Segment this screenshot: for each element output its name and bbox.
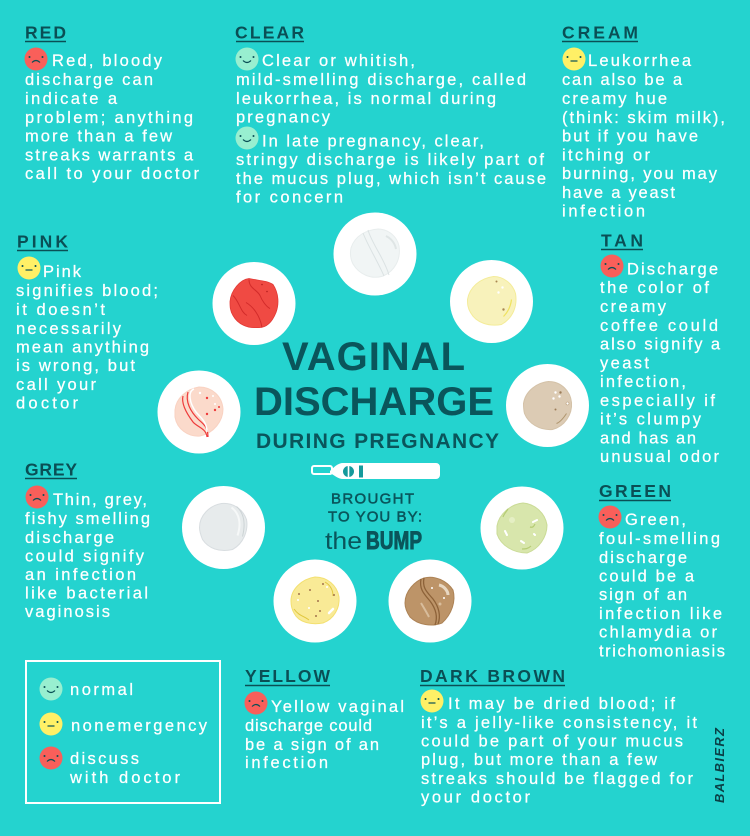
text: cream description: creamy hue: [562, 90, 667, 108]
text: dark brown description: plug, but more than a few: [421, 751, 657, 769]
icon: pregnancy test: [312, 463, 440, 479]
heading: grey: GREY: [25, 460, 77, 480]
text: yellow description: Yellow vaginal: [271, 698, 404, 716]
heading: yellow: YELLOW: [245, 666, 330, 686]
text: green description: [599, 511, 725, 660]
sample: tan: [506, 364, 589, 447]
text: tan description: Discharge: [627, 260, 718, 278]
legend icon: normal: [40, 678, 62, 700]
text: cream description: burning, you may: [562, 165, 718, 183]
icon: happy face: [236, 48, 258, 70]
title: [254, 335, 499, 453]
legend labels: nonemergency: [71, 717, 208, 735]
text: green description: infection like: [599, 605, 722, 623]
sample: red: [212, 262, 296, 345]
text: grey description: Thin, grey,: [53, 491, 147, 509]
heading: green: GREEN: [599, 481, 671, 501]
text: cream description: have a yeast: [562, 184, 675, 202]
sample: dark brown: [388, 560, 472, 642]
text: tan description: yeast: [600, 354, 649, 372]
text: dark brown description: your doctor: [421, 788, 530, 806]
text: pink description: Pink: [43, 263, 82, 281]
icon: happy face: [236, 126, 258, 150]
text: pink description: call your: [16, 376, 96, 394]
text: green description: sign of an: [599, 586, 687, 604]
sample: clear: [334, 212, 416, 296]
text: cream description: but if you have: [562, 128, 698, 146]
text: dark brown description: [421, 695, 697, 806]
icon: sad face: [24, 48, 48, 70]
sample: grey: [182, 486, 265, 569]
text: red description: problem; anything: [25, 109, 193, 127]
text: clear description: mild-smelling discharge, called: [236, 71, 526, 89]
text: tan description: it’s clumpy: [600, 410, 702, 428]
text: dark brown description: It may be dried blood; if: [448, 695, 675, 713]
icon: sad face: [598, 506, 622, 528]
legend labels: [69, 681, 208, 787]
sample: green: [480, 486, 564, 570]
text: tan description: the color of: [600, 279, 709, 297]
text: tan description: especially if: [600, 392, 715, 410]
text: clear description: stringy discharge is likely part of: [236, 151, 544, 169]
text: dark brown description: it’s a jelly-like consistency, it: [421, 714, 697, 732]
panel: yellow: [244, 666, 404, 772]
text: green description: could be a: [599, 568, 695, 586]
heading: red: RED: [25, 22, 66, 42]
legend icon: discuss with doctor: [40, 746, 62, 770]
text: yellow description: discharge could: [245, 717, 372, 735]
text: pink description: necessarily: [16, 320, 122, 338]
text: dark brown description: streaks should be flagged for: [421, 770, 694, 788]
text: red description: [25, 52, 200, 183]
logo: the bump: [325, 527, 422, 555]
text: grey description: [25, 491, 150, 621]
icon: sad face: [600, 254, 624, 278]
text: red description: discharge can: [25, 71, 153, 89]
text: red description: indicate a: [25, 90, 118, 108]
text: yellow description: be a sign of an: [245, 736, 379, 754]
legend labels: normal: [70, 681, 133, 699]
text: grey description: fishy smelling: [25, 510, 150, 528]
text: cream description: itching or: [562, 146, 650, 164]
text: cream description: Leukorrhea: [588, 52, 692, 70]
text: pink description: mean anything: [16, 338, 149, 356]
text: grey description: vaginosis: [25, 603, 110, 621]
legend icon: nonemergency: [40, 712, 62, 736]
text: red description: Red, bloody: [52, 52, 163, 70]
icon: neutral face: [420, 690, 444, 712]
sample: yellow: [274, 560, 356, 642]
text: grey description: discharge: [25, 529, 114, 547]
text: tan description: coffee could: [600, 317, 718, 335]
credit: balbierz: BALBIERZ: [712, 727, 727, 803]
subtitle: during pregnancy: DURING PREGNANCY: [256, 430, 499, 453]
text: tan description: also signify a: [600, 336, 721, 354]
legend: [26, 661, 220, 803]
logo: the bump: BUMP: [366, 527, 422, 555]
credit: brought to you by: TO YOU BY:: [328, 508, 422, 526]
text: tan description: [600, 260, 721, 466]
text: green description: Green,: [625, 511, 686, 529]
text: tan description: unusual odor: [600, 448, 720, 466]
text: red description: more than a few: [25, 128, 172, 146]
panel: clear: [235, 22, 546, 206]
heading: tan: TAN: [601, 230, 643, 250]
text: grey description: an infection: [25, 566, 136, 584]
text: yellow description: [245, 698, 404, 772]
text: pink description: is wrong, but: [16, 357, 135, 375]
text: clear description: for concern: [236, 188, 343, 206]
panel: cream: [562, 22, 725, 220]
text: pink description: [16, 263, 158, 412]
sample: pink: [158, 370, 240, 454]
text: dark brown description: could be part of your mucus: [421, 732, 683, 750]
icon: neutral face: [562, 48, 586, 70]
title: vaginal: VAGINAL: [282, 335, 465, 379]
credit: brought to you by: [325, 490, 422, 555]
panel: grey: [25, 460, 150, 621]
panel: green: [598, 481, 725, 660]
text: green description: foul-smelling: [599, 530, 720, 548]
text: cream description: can also be a: [562, 71, 683, 89]
text: clear description: In late pregnancy, clear,: [262, 132, 484, 150]
text: grey description: could signify: [25, 548, 145, 566]
text: clear description: the mucus plug, which isn’t cause: [236, 170, 546, 188]
text: red description: call to your doctor: [25, 165, 200, 183]
text: green description: discharge: [599, 549, 687, 567]
credit: brought to you by: BROUGHT: [331, 490, 414, 508]
panel: tan: [600, 230, 721, 466]
text: clear description: pregnancy: [236, 108, 331, 126]
text: cream description: [562, 52, 725, 220]
sample: cream: [450, 260, 533, 343]
text: grey description: like bacterial: [25, 584, 148, 602]
legend labels: with doctor: [69, 769, 180, 787]
text: tan description: and has an: [600, 430, 696, 448]
panel: red: [24, 22, 200, 183]
heading: dark brown: DARK BROWN: [420, 666, 565, 686]
text: yellow description: infection: [245, 754, 328, 772]
text: tan description: infection,: [600, 373, 686, 391]
panel: dark brown: [420, 666, 697, 806]
title: discharge: DISCHARGE: [254, 380, 494, 424]
panel: pink: [16, 232, 158, 412]
text: pink description: doctor: [16, 394, 78, 412]
heading: pink: PINK: [17, 232, 68, 252]
text: green description: trichomoniasis: [599, 642, 725, 660]
icon: sad face: [244, 692, 268, 714]
icon: neutral face: [18, 256, 40, 280]
text: tan description: creamy: [600, 298, 667, 316]
text: red description: streaks warrants a: [25, 146, 194, 164]
heading: clear: CLEAR: [235, 22, 304, 42]
text: green description: chlamydia or: [599, 624, 718, 642]
text: clear description: Clear or whitish,: [262, 52, 415, 70]
icon: sad face: [26, 486, 48, 508]
text: pink description: signifies blood;: [16, 282, 158, 300]
text: clear description: leukorrhea, is normal during: [236, 90, 496, 108]
legend labels: discuss: [70, 750, 139, 768]
logo: the bump: the: [325, 528, 362, 555]
text: cream description: infection: [562, 202, 645, 220]
text: cream description: (think: skim milk),: [562, 109, 725, 127]
text: pink description: it doesn’t: [16, 301, 105, 319]
text: clear description: [236, 52, 546, 206]
heading: cream: CREAM: [562, 22, 638, 42]
